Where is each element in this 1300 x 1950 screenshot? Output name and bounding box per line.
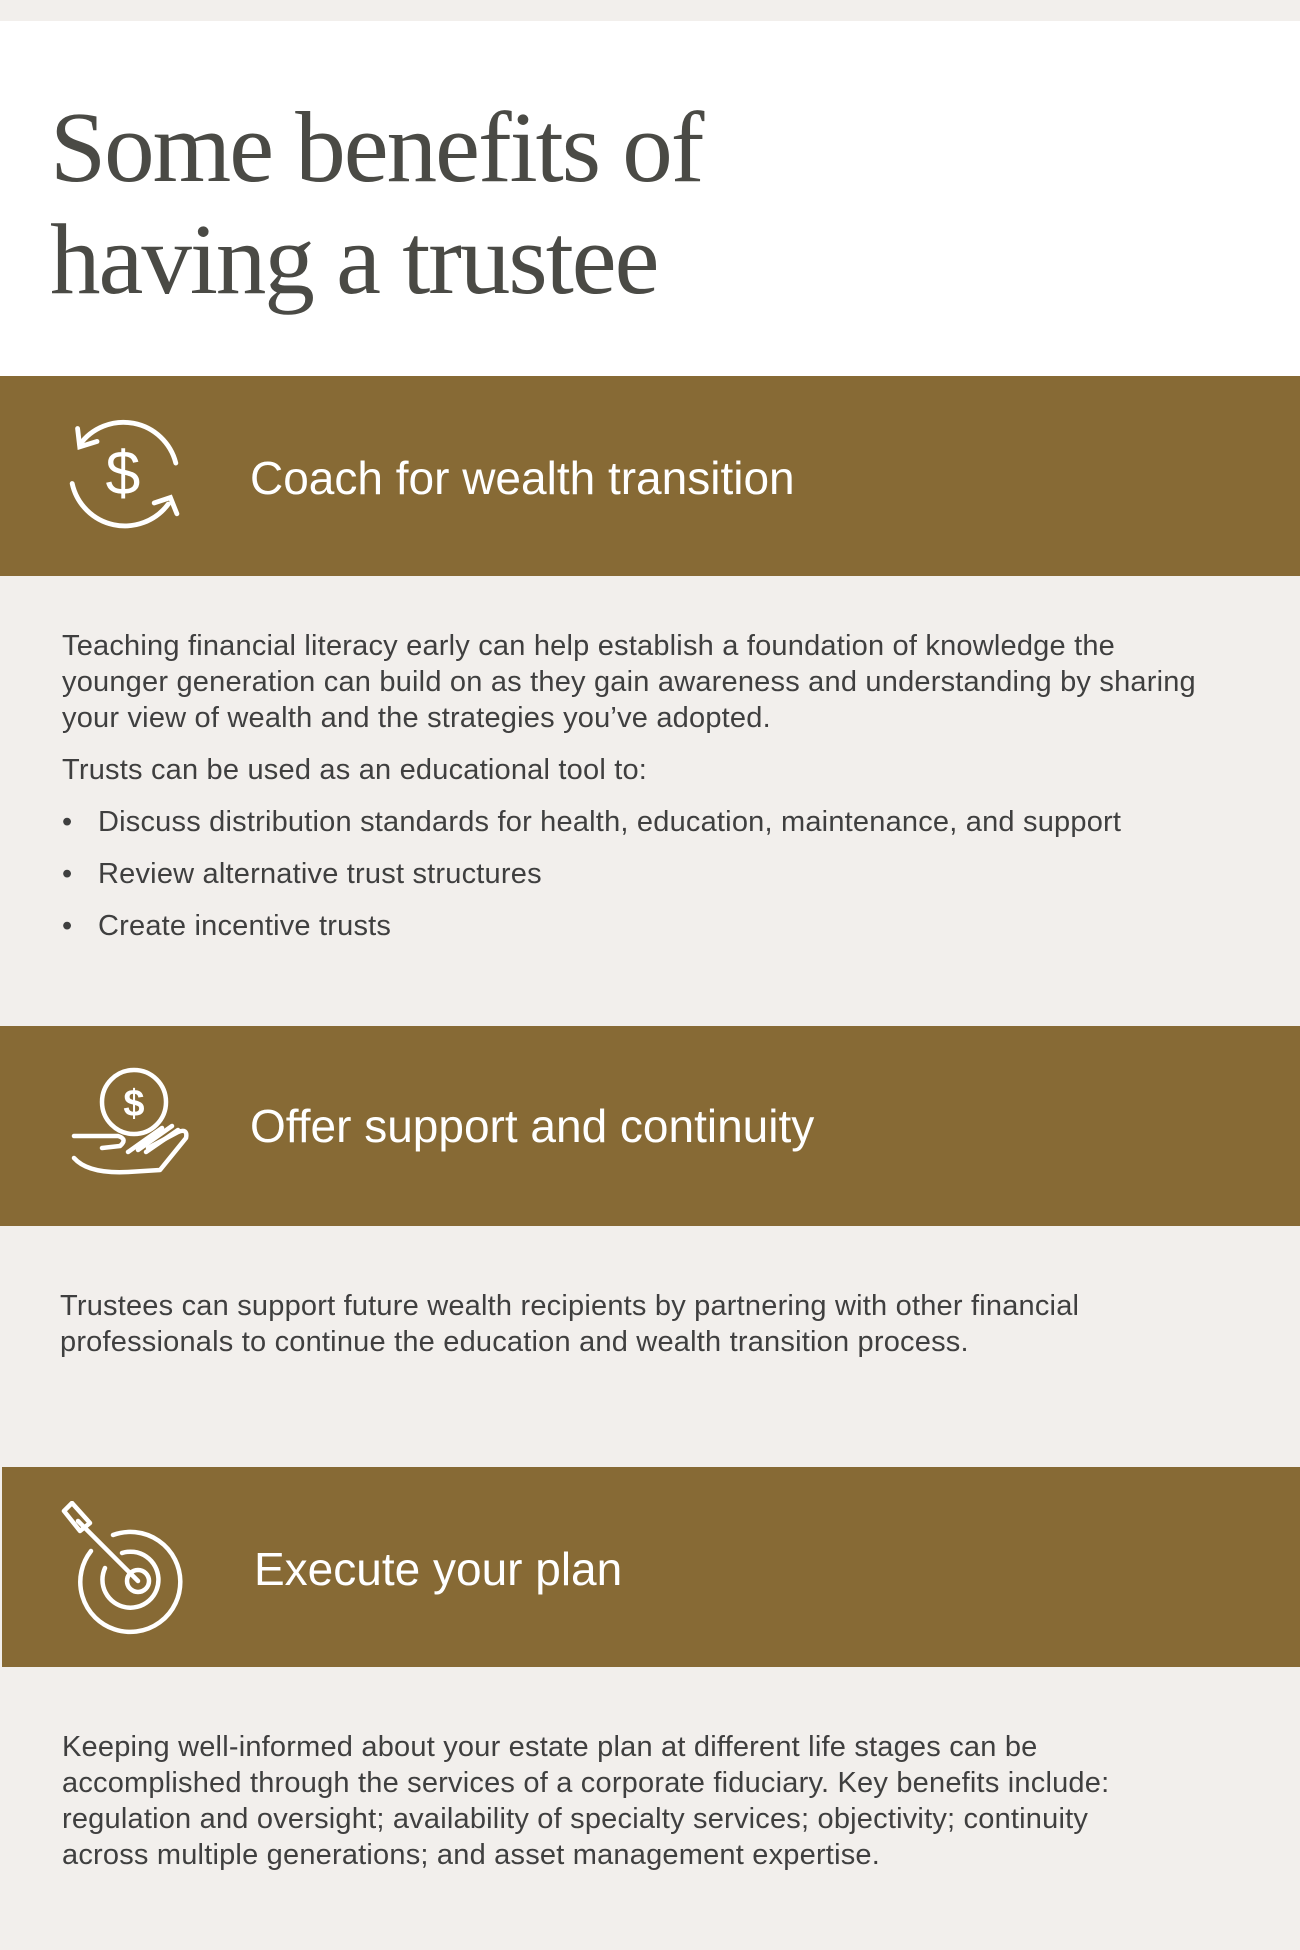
bullet list	[62, 806, 1121, 942]
heading: Coach for wealth transition	[250, 452, 795, 504]
bullet list: Discuss distribution standards for health, education, maintenance, and support	[98, 806, 1121, 838]
panel: execute body: regulation and oversight; availability of specialty services; objectivity; continuity	[62, 1803, 1088, 1835]
title: having a trustee	[50, 203, 657, 315]
panel: support body	[60, 1290, 1079, 1358]
panel: coach body: younger generation can build on as they gain awareness and understanding by sharing	[62, 666, 1196, 698]
heading: Offer support and continuity	[250, 1100, 814, 1152]
panel: execute body: across multiple generations; and asset management expertise.	[62, 1839, 880, 1871]
panel: support body: professionals to continue the education and wealth transition process.	[60, 1326, 969, 1358]
top strip	[0, 0, 1300, 21]
panel: execute body: accomplished through the services of a corporate fiduciary. Key benefits include:	[62, 1767, 1109, 1799]
panel: execute body: Keeping well-informed about your estate plan at different life stages can be	[62, 1731, 1038, 1763]
panel: coach body: your view of wealth and the strategies you’ve adopted.	[62, 702, 771, 734]
panel: support body: Trustees can support future wealth recipients by partnering with other financial	[60, 1290, 1079, 1322]
panel: coach body	[62, 630, 1196, 942]
panel: execute body	[62, 1731, 1109, 1871]
icon: circular arrows dollar: $	[106, 438, 140, 508]
panel: coach body: Trusts can be used as an educational tool to:	[62, 754, 647, 786]
bullet list: •	[62, 806, 72, 838]
icon: hand with coin: $	[123, 1083, 145, 1125]
bullet list: Review alternative trust structures	[98, 858, 542, 890]
title: Some benefits of	[50, 91, 702, 203]
icon: hand with coin	[72, 1068, 189, 1174]
title area	[0, 21, 1300, 376]
bullet list: •	[62, 910, 72, 942]
panel: support band	[0, 1026, 1300, 1226]
icon: target with arrow	[62, 1501, 183, 1634]
panel: coach band	[0, 376, 1300, 576]
panel: coach body: Teaching financial literacy early can help establish a foundation of knowledge the	[62, 630, 1115, 662]
icon: circular arrows dollar	[70, 420, 180, 528]
heading: Execute your plan	[254, 1543, 622, 1595]
title	[50, 91, 704, 315]
bullet list: •	[62, 858, 72, 890]
bullet list: Create incentive trusts	[98, 910, 391, 942]
panel: execute band	[2, 1467, 1300, 1667]
